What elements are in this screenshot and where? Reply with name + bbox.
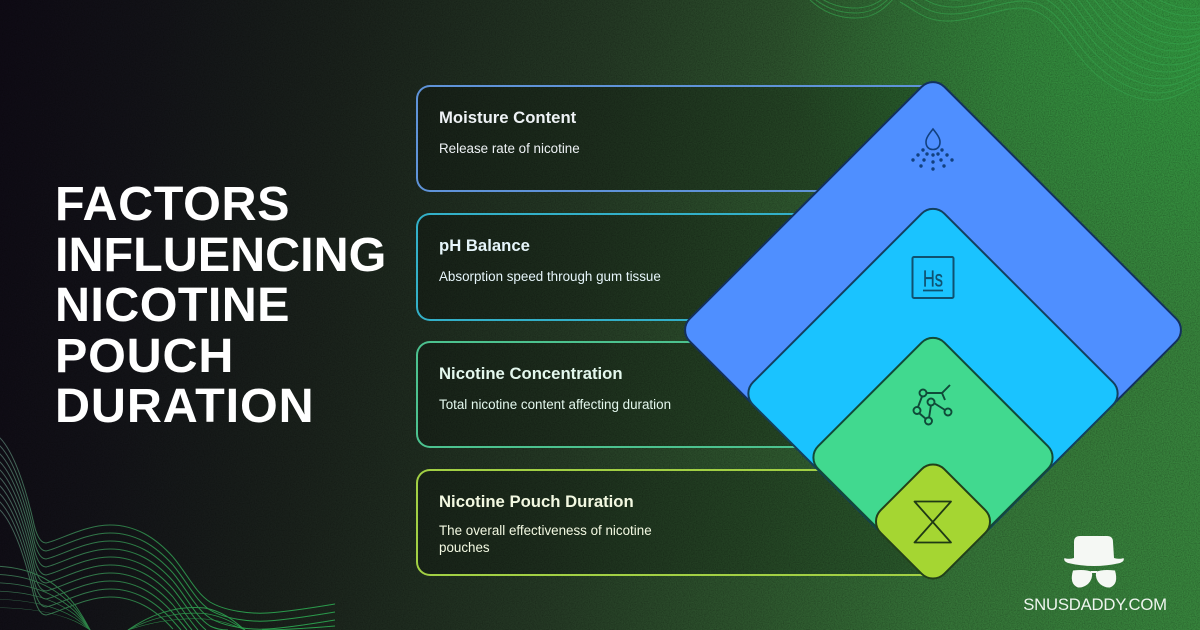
title: POUCH (55, 329, 234, 383)
diamond: lime (869, 458, 997, 585)
waves: top right (808, 0, 1200, 100)
icon: hourglass (914, 502, 951, 542)
card: pH Balance (416, 213, 926, 321)
diamond: green (807, 331, 1059, 584)
card: pH Balance: pH Balance (439, 236, 530, 255)
card: Nicotine Concentration (416, 341, 926, 448)
icon: water drop with droplets (911, 129, 954, 171)
card: pH Balance: Absorption speed through gum tissue (439, 269, 661, 284)
card: Nicotine Pouch Duration (416, 469, 926, 576)
card: Moisture Content: Release rate of nicotine (439, 141, 580, 156)
diamond: cyan (742, 202, 1124, 585)
card: Nicotine Pouch Duration: Nicotine Pouch Duration (439, 492, 634, 511)
logo text: SNUSDADDY.COM (1023, 595, 1167, 614)
card: Nicotine Concentration: Nicotine Concentration (439, 364, 623, 383)
icon: molecule network (914, 385, 952, 424)
card: Nicotine Concentration: Total nicotine content affecting duration (439, 397, 671, 412)
title: DURATION (55, 379, 315, 433)
diamond: blue (678, 75, 1188, 585)
title: NICOTINE (55, 278, 290, 332)
icon: periodic element Hs: Hs (923, 266, 943, 292)
title: INFLUENCING (55, 228, 386, 282)
title: FACTORS (55, 177, 290, 231)
card: Nicotine Pouch Duration: The overall effectiveness of nicotine pouches (439, 523, 652, 554)
title (55, 177, 386, 433)
card: Moisture Content: Moisture Content (439, 108, 576, 127)
card: Moisture Content (416, 85, 926, 192)
waves: bottom left (0, 436, 335, 630)
icon: periodic element Hs (912, 257, 954, 298)
